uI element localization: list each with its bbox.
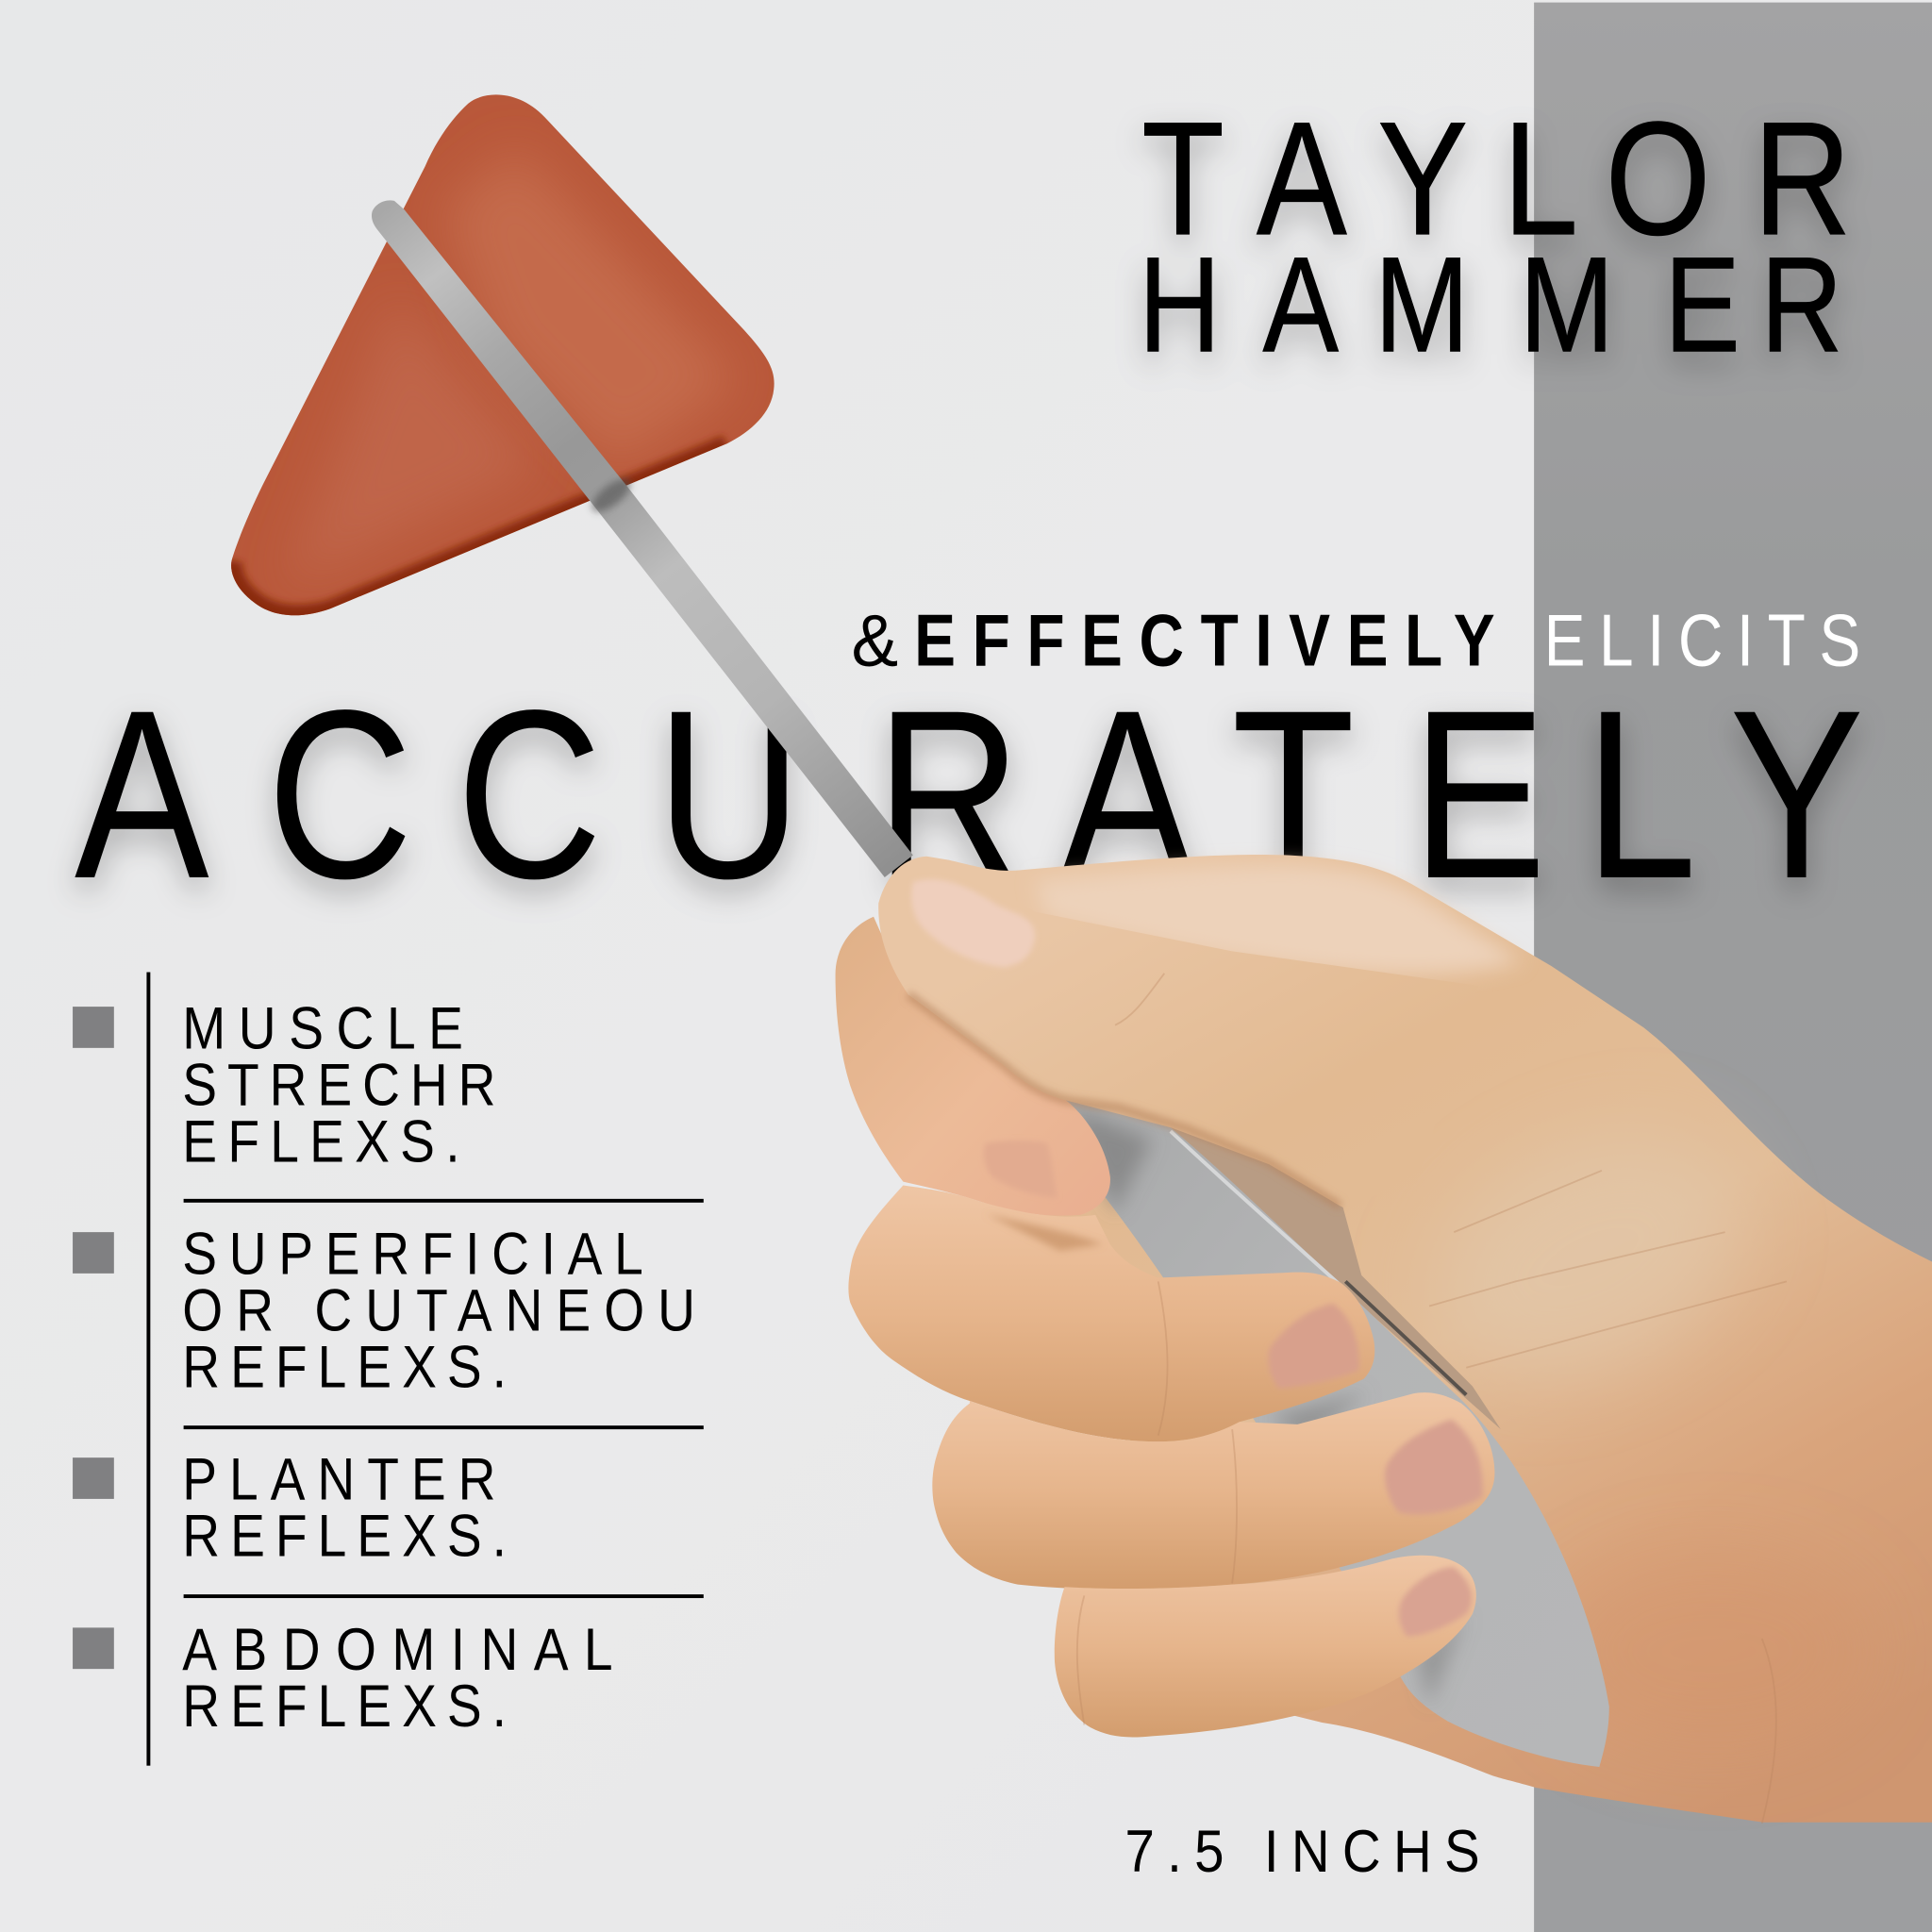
title: Taylor Hammer — [1139, 89, 1851, 381]
bullet list — [73, 973, 704, 1766]
bullet item 1: muscle stretch reflexes — [73, 995, 495, 1174]
subheading: & effectively elicits: ELICITS — [1544, 599, 1860, 682]
hand holding the hammer — [836, 855, 1932, 1824]
size caption: 7.5 inches: 7.5 INCHS — [1124, 1818, 1480, 1885]
little finger nail — [1399, 1567, 1472, 1637]
bullet item 3: planter reflexes: REFLEXS. — [182, 1503, 507, 1569]
hammer head: red triangular rubber — [231, 94, 774, 615]
hammer shaft and ring — [372, 200, 913, 877]
shadow wedge beside handle — [1171, 1127, 1501, 1429]
thumb nail — [911, 879, 1035, 967]
subheading: & effectively elicits — [852, 599, 1860, 682]
bullet item 2: superficial or cutaneous reflexes: REFLEXS. — [182, 1334, 507, 1400]
little finger — [1055, 1556, 1476, 1737]
index finger — [836, 917, 1110, 1216]
index nail — [984, 1141, 1058, 1198]
bullet item 2: superficial or cutaneous reflexes — [73, 1221, 695, 1400]
subheading: & effectively elicits: EFFECTIVELY — [914, 599, 1495, 682]
thumb web highlight — [1035, 865, 1522, 974]
divider — [184, 1199, 704, 1203]
divider — [184, 1594, 704, 1598]
thumb, sharing the palm gradient — [878, 857, 1478, 1207]
bullet item 4: abdominal reflexes: REFLEXS. — [182, 1674, 507, 1740]
divider — [184, 1425, 704, 1429]
thumb underside crease — [908, 994, 1341, 1207]
finger three nail — [1385, 1420, 1483, 1514]
finger three — [932, 1392, 1494, 1590]
grey vertical band — [1534, 3, 1932, 1932]
bullet item 1: muscle stretch reflexes: EFLEXS. — [182, 1108, 460, 1174]
bullet item 1: muscle stretch reflexes: STRECHR — [182, 1052, 495, 1118]
bullet item 3: planter reflexes — [73, 1446, 507, 1569]
bullet item 2: superficial or cutaneous reflexes: OR CUTANEOU — [182, 1277, 695, 1343]
finger two knuckle shadow — [986, 1214, 1103, 1251]
headline: Accurately: ACCURATELY — [75, 659, 1864, 928]
handle grip — [1066, 1100, 1609, 1767]
bullet item 4: abdominal reflexes: ABDOMINAL — [182, 1617, 613, 1683]
vertical rule — [146, 973, 150, 1766]
title: Taylor Hammer: TAYLOR — [1141, 89, 1851, 269]
skin creases — [1077, 974, 1787, 1824]
finger two nail — [1268, 1304, 1359, 1389]
title: Taylor Hammer: HAMMER — [1139, 229, 1842, 381]
bullet item 2: superficial or cutaneous reflexes: SUPERFICIAL — [182, 1221, 643, 1287]
hand base: wrist, palm and thumb — [937, 855, 1932, 1823]
palm highlight — [1397, 1089, 1781, 1425]
bullet item 1: muscle stretch reflexes: MUSCLE — [182, 995, 463, 1061]
bullet item 4: abdominal reflexes — [73, 1617, 613, 1740]
palm lower warm tone — [1553, 1553, 1873, 1750]
subheading: & effectively elicits: & — [852, 600, 898, 682]
bullet item 3: planter reflexes: PLANTER — [182, 1446, 495, 1512]
finger two — [848, 1185, 1374, 1441]
